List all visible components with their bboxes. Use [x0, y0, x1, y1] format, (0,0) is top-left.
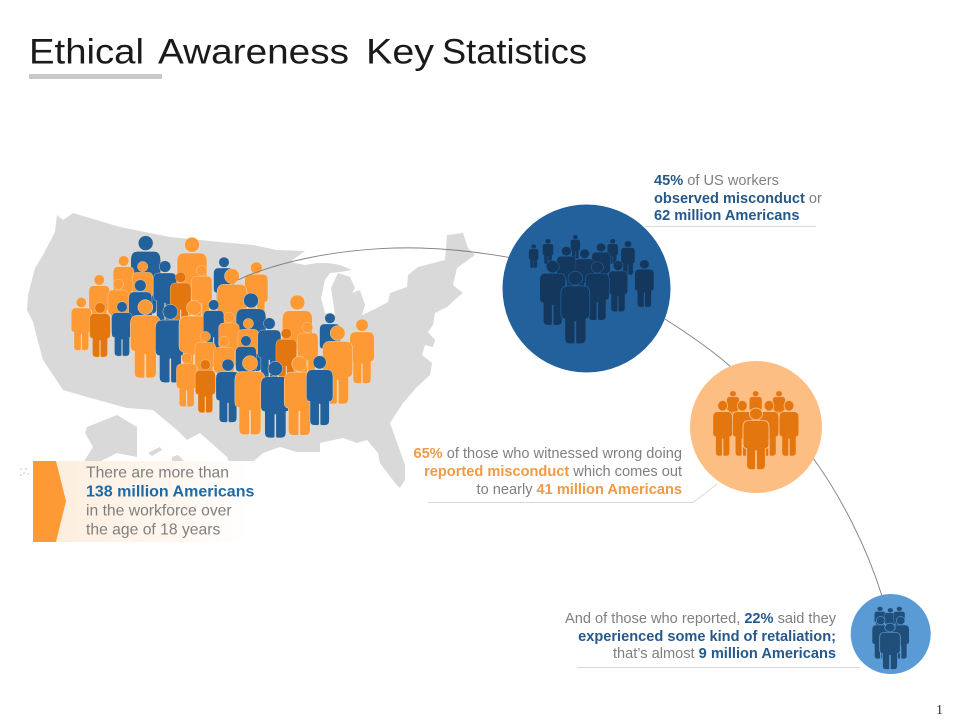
connector arc: first to second circle — [665, 319, 731, 367]
crowd of people — [71, 236, 374, 438]
callout: 65 percent: 65% of those who witnessed wrong doing — [413, 446, 682, 462]
callout: 45 percent: 45% of US workers — [654, 173, 779, 189]
text: workforce statement: 138 million Americans — [86, 484, 254, 500]
callout: 45 percent — [645, 173, 822, 226]
circle: 45 percent crowd — [502, 204, 670, 372]
title — [29, 32, 587, 72]
text: workforce statement: in the workforce over — [86, 502, 232, 520]
map: Alaska — [83, 415, 137, 463]
connector arc: second to third circle — [813, 458, 882, 596]
text: workforce statement — [86, 464, 254, 538]
map: United States — [27, 213, 475, 488]
callout panel: 138 million — [33, 461, 270, 542]
callout: 22 percent — [565, 611, 860, 668]
callout: 22 percent: And of those who reported, 22% said they — [565, 611, 837, 627]
callout: 65 percent: reported misconduct which comes out — [424, 464, 682, 480]
title: Key — [366, 32, 435, 72]
decorative dots icon — [20, 468, 29, 476]
title: Statistics — [442, 32, 587, 72]
callout: 45 percent: 62 million Americans — [654, 208, 799, 224]
connector arc: map to first circle — [238, 248, 512, 280]
callout: 65 percent: to nearly 41 million Americans — [477, 482, 682, 498]
icon: orange crowd — [713, 391, 799, 470]
text: workforce statement: the age of 18 years — [86, 522, 220, 538]
page number: 1 — [936, 703, 943, 718]
icon: navy crowd — [872, 607, 909, 669]
title underline bar — [29, 74, 162, 79]
icon: dark blue crowd — [529, 235, 654, 344]
callout: 65 percent — [413, 446, 717, 502]
map: Hawaii — [148, 447, 184, 461]
callout: 22 percent: that’s almost 9 million Americans — [613, 646, 836, 662]
circle: 22 percent crowd — [851, 594, 931, 674]
title: Awareness — [158, 32, 349, 72]
callout: 45 percent: observed misconduct or — [654, 191, 822, 207]
callout: 22 percent: experienced some kind of retaliation; — [578, 629, 836, 645]
title: Ethical — [29, 32, 144, 72]
icon: orange chevron — [33, 461, 66, 542]
circle: 65 percent crowd — [690, 361, 822, 493]
text: workforce statement: There are more than — [86, 464, 229, 482]
